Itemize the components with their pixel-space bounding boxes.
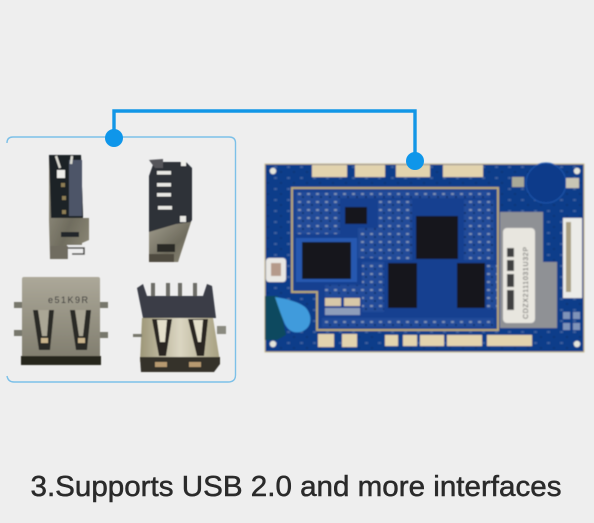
board base bbox=[265, 164, 584, 352]
sticker serial number: CDZX2111031U32P bbox=[523, 247, 530, 319]
dot: connector frame node bbox=[105, 129, 123, 147]
RAM surround bbox=[296, 238, 357, 282]
small resistors bbox=[325, 298, 341, 306]
label sticker bbox=[503, 228, 535, 323]
shield can bbox=[500, 212, 557, 328]
top connectors bbox=[312, 165, 483, 177]
icon: USB connector side view right bbox=[149, 159, 192, 262]
blue capacitor bbox=[265, 296, 286, 340]
connector line bbox=[114, 111, 415, 161]
dot: board node bbox=[406, 152, 424, 170]
gold core module outline bbox=[292, 188, 498, 330]
icon: USB connector side view left bbox=[49, 155, 89, 259]
chips bbox=[302, 207, 485, 308]
image: control board bbox=[265, 163, 584, 352]
display ribbon connector bbox=[563, 218, 582, 298]
title: 3.Supports USB 2.0 and more interfaces bbox=[30, 471, 562, 503]
right side pads bbox=[563, 312, 580, 330]
corner pads bbox=[270, 168, 580, 347]
component clusters bbox=[296, 191, 497, 327]
battery circle bbox=[526, 163, 566, 203]
micro USB port bbox=[266, 258, 286, 282]
icon: USB connector front view bbox=[14, 277, 108, 365]
bottom connectors bbox=[318, 334, 532, 347]
panel: USB connector frame bbox=[7, 137, 236, 382]
icon: USB connector angled view bbox=[133, 283, 226, 372]
connector marking: e51K9R bbox=[48, 295, 88, 305]
